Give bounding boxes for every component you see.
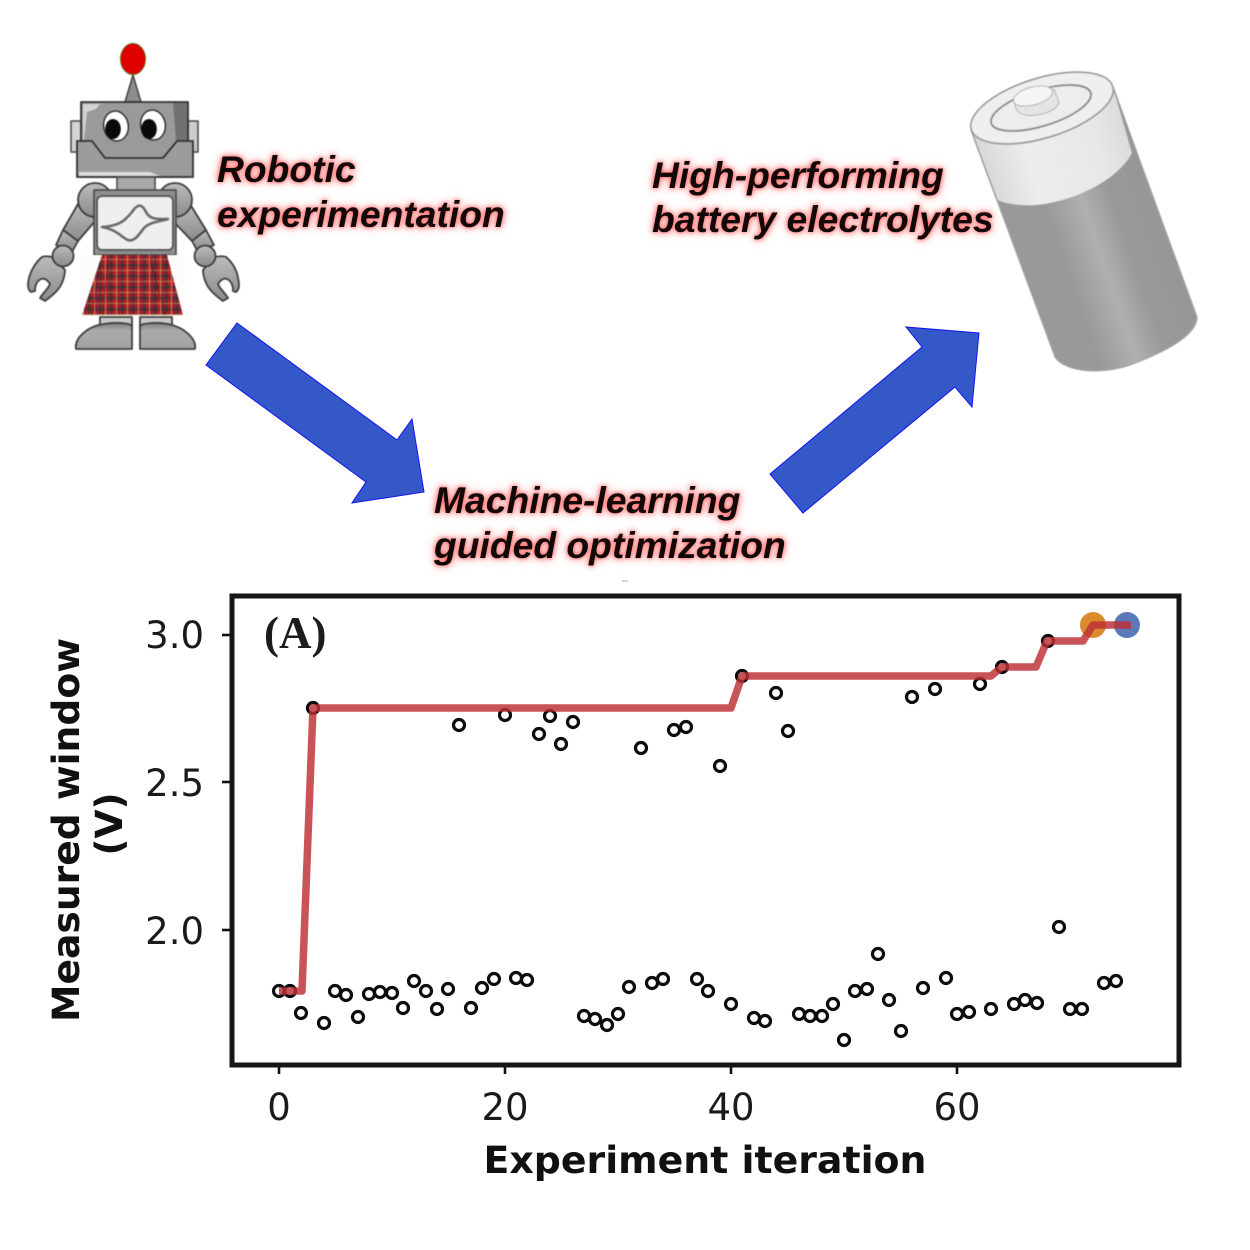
y tick labels (145, 614, 204, 953)
label: machine-learning guided optimization (429, 479, 790, 572)
label: machine-learning guided optimization: guided optimization (434, 524, 786, 566)
icon: battery (962, 58, 1197, 371)
chart: measured window vs experiment iteration (44, 596, 1179, 1182)
robot torso with voltammogram screen (94, 177, 176, 255)
plot frame (232, 596, 1179, 1065)
x tick labels: 40 (707, 1086, 755, 1129)
robot kilt (81, 255, 185, 317)
panel label: (A) (264, 608, 326, 658)
arrow: robot to machine learning (206, 323, 424, 503)
y tick labels: 2.0 (145, 910, 204, 953)
axis ticks (222, 635, 957, 1074)
robot feet (76, 317, 195, 349)
robot antenna (120, 44, 146, 102)
best-so-far line (279, 625, 1131, 991)
x tick labels: 20 (481, 1086, 529, 1129)
highlighted final points (1080, 612, 1140, 638)
icon: robot in kilt (28, 44, 239, 349)
y tick labels: 3.0 (145, 614, 204, 657)
scatter points (274, 636, 1122, 1046)
battery cap (971, 87, 1132, 205)
y axis title: Measured window (44, 638, 88, 1022)
y axis title: (V) (87, 792, 131, 856)
robot arms and hands (28, 183, 239, 301)
label: robotic experimentation (212, 148, 510, 240)
x tick labels (267, 1086, 981, 1129)
label: robotic experimentation: experimentation (217, 193, 505, 235)
label: robotic experimentation: Robotic (217, 148, 356, 190)
y axis title (44, 638, 131, 1022)
x axis title: Experiment iteration (484, 1138, 926, 1182)
label: high-performing battery electrolytes: High-performing (652, 154, 944, 196)
label: high-performing battery electrolytes (647, 154, 997, 245)
battery body (971, 87, 1197, 371)
arrow: machine learning to battery (770, 327, 979, 513)
x tick labels: 0 (267, 1086, 291, 1129)
label: machine-learning guided optimization: Machine-learning (434, 479, 740, 521)
y tick labels: 2.5 (145, 762, 204, 805)
label: high-performing battery electrolytes: battery electrolytes (652, 198, 994, 240)
x tick labels: 60 (933, 1086, 981, 1129)
robot head (71, 102, 198, 177)
battery terminal (986, 76, 1096, 140)
